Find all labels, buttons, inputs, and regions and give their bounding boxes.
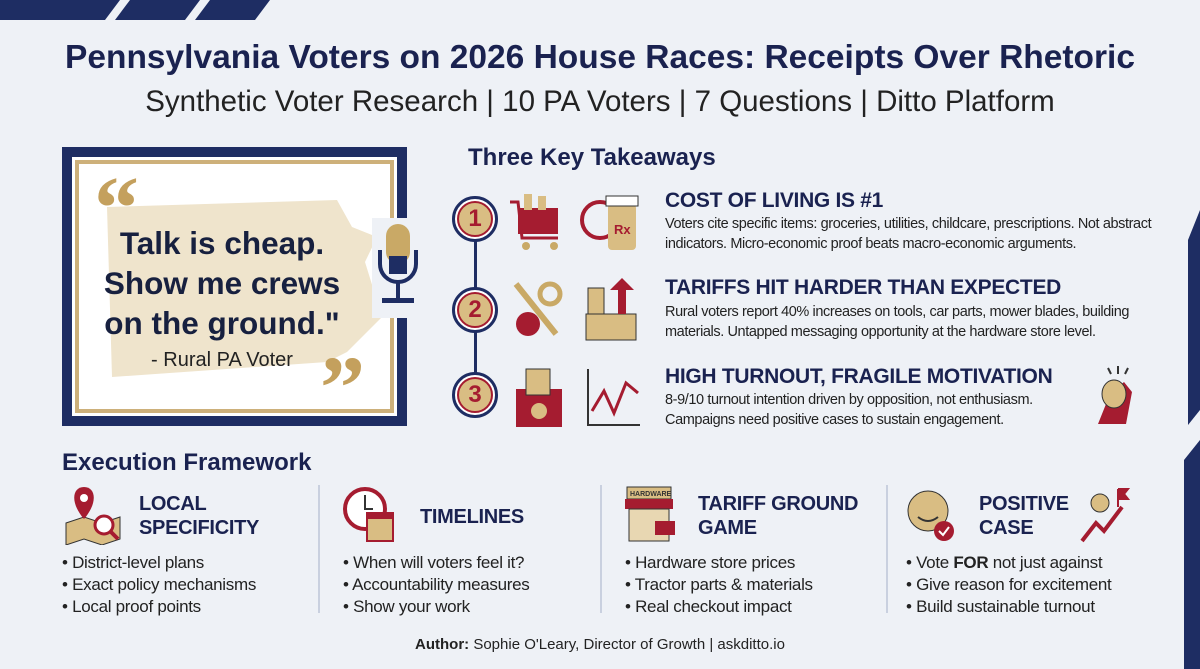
title: Pennsylvania Voters on 2026 House Races: Receipts Over Rhetoric	[65, 39, 1135, 76]
quote text: Show me crews	[104, 265, 340, 301]
icon: smiley	[908, 490, 954, 541]
panel: tariff ground game: TARIFF GROUND	[698, 493, 858, 515]
heading 2: TARIFFS HIT HARDER THAN EXPECTED	[665, 276, 1061, 299]
panel: local specificity: LOCAL	[139, 493, 206, 515]
panel: positive case: Vote FOR not just against	[916, 553, 1102, 572]
timeline	[452, 196, 498, 418]
panel: positive case	[906, 488, 1130, 616]
panel: positive case: CASE	[979, 517, 1033, 539]
body 1: Voters cite specific items: groceries, utilities, childcare, prescriptions. Not abstract indicators. Micro-economic proof beats macro-economic arguments.	[665, 216, 1151, 252]
panel: positive case: POSITIVE	[979, 493, 1069, 515]
number 2	[452, 287, 498, 333]
footer: author: Author: Sophie O'Leary, Director of Growth | askditto.io	[415, 636, 785, 653]
number 3	[452, 372, 498, 418]
number 2: 2	[468, 296, 482, 323]
panel: timelines: TIMELINES	[420, 506, 524, 528]
heading 3: HIGH TURNOUT, FRAGILE MOTIVATION	[665, 365, 1052, 388]
icon: map pin	[66, 487, 120, 545]
panel: tariff ground game	[625, 486, 858, 616]
icon: hardware store	[625, 486, 675, 542]
icon: cart and pills	[510, 194, 638, 250]
panel: positive case: Build sustainable turnout	[916, 597, 1095, 616]
heading: execution framework: Execution Framework	[62, 449, 311, 476]
icon: clock calendar	[343, 487, 394, 542]
body 3: 8-9/10 turnout intention driven by opposition, not enthusiasm. Campaigns need positive cases to sustain engagement.	[665, 392, 1033, 428]
panel: local specificity: Local proof points	[72, 597, 201, 616]
icon: handshake	[1098, 366, 1132, 424]
body 2: Rural voters report 40% increases on tools, car parts, mower blades, building materials. Untapped messaging opportunity at the hardware store level.	[665, 304, 1129, 340]
panel: local specificity: Exact policy mechanisms	[72, 575, 256, 594]
number 3: 3	[468, 381, 482, 408]
icon: ballot box and chart	[516, 368, 640, 427]
panel: timelines: Show your work	[353, 597, 470, 616]
panel: timelines	[343, 487, 530, 616]
decoration: right edge shapes	[1184, 210, 1200, 669]
panel: positive case: Give reason for excitement	[916, 575, 1111, 594]
PA shape	[107, 200, 381, 377]
panel: tariff ground game: Real checkout impact	[635, 597, 792, 616]
icon: tools and lumber	[514, 278, 636, 340]
panel: local specificity	[62, 487, 259, 616]
icon: hardware store: HARDWARE	[630, 491, 672, 498]
subtitle: Synthetic Voter Research | 10 PA Voters | 7 Questions | Ditto Platform	[145, 85, 1055, 118]
panel: timelines: Accountability measures	[352, 575, 530, 594]
decoration: top-left stripes	[0, 0, 270, 20]
panel: quote: ”	[320, 339, 365, 438]
panel: local specificity: SPECIFICITY	[139, 517, 259, 539]
panel: tariff ground game: Tractor parts & materials	[635, 575, 813, 594]
panel: tariff ground game: GAME	[698, 517, 757, 539]
panel: tariff ground game: Hardware store prices	[635, 553, 795, 572]
quote text: Talk is cheap.	[120, 225, 324, 261]
quote text	[104, 225, 340, 341]
quote marks: “	[94, 159, 139, 258]
quote text: on the ground."	[104, 305, 340, 341]
panel: quote	[62, 147, 407, 426]
heading 1: COST OF LIVING IS #1	[665, 189, 883, 212]
heading: three key takeaways: Three Key Takeaways	[468, 144, 716, 171]
panel: local specificity: District-level plans	[72, 553, 204, 572]
icon: cart and pills: Rx	[614, 222, 631, 237]
icon: rising arrow	[1080, 488, 1130, 542]
number 1: 1	[468, 205, 482, 232]
attribution: - Rural PA Voter	[151, 349, 293, 371]
icon: microphone	[372, 218, 418, 318]
number 1	[452, 196, 498, 242]
panel: timelines: When will voters feel it?	[353, 553, 524, 572]
